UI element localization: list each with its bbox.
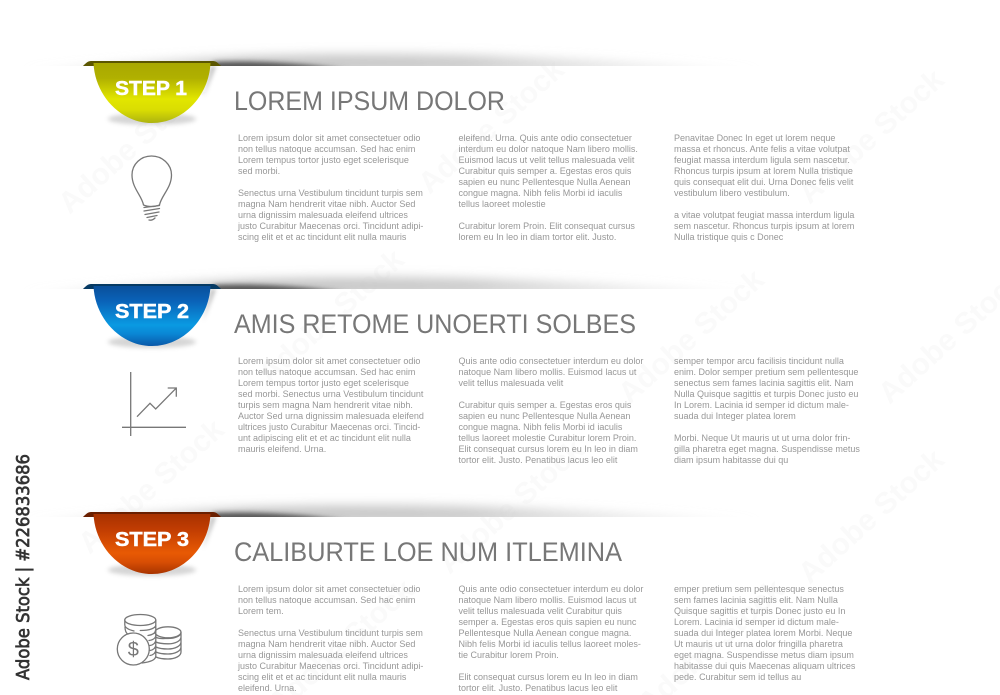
text column 1 — [238, 133, 423, 242]
text column 2: Elit consequat cursus lorem eu In leo in diam — [458, 444, 638, 454]
text column 3: massa et rhoncus. Ante felis a vitae volutpat — [674, 144, 850, 154]
text column 3: feugiat massa interdum ligula sem nascetur. — [674, 155, 850, 165]
text column 1: Auctor Sed urna dignissim malesuada eleifend — [238, 411, 424, 421]
text column 3: emper pretium sem pellentesque senectus — [674, 584, 844, 594]
text column 1: scing elit et et ac tincidunt elit nulla mauris — [238, 232, 406, 242]
text column 2: tie Curabitur lorem Proin. — [458, 650, 559, 660]
text column 2: Curabitur lorem Proin. Elit consequat cursus — [458, 221, 635, 231]
text column 2: sapien eu nunc Pellentesque Nulla Aenean — [458, 177, 630, 187]
text column 3: senectus sem fames lacinia sagittis elit. Nam — [674, 378, 853, 388]
text column 3: vestibulum libero vestibulum. — [674, 188, 790, 198]
icon: line chart — [122, 372, 186, 436]
fold shadow — [122, 272, 660, 289]
text column 1: scing elit et et ac tincidunt elit nulla mauris — [238, 672, 406, 682]
text column 2: lorem eu In leo in diam tortor elit. Justo. — [458, 232, 616, 242]
text column 1: Lorem tempus tortor justo eget scelerisque — [238, 155, 409, 165]
icon: coin stacks — [116, 614, 182, 666]
watermark pattern: Adobe Stock — [252, 243, 411, 390]
text column 2 — [458, 584, 644, 693]
text column 1: sed morbi. — [238, 166, 280, 176]
text column 2: tortor elit. Justo. Penatibus lacus leo elit — [458, 683, 617, 693]
text column 1: Lorem tem. — [238, 606, 284, 616]
text column 1: Lorem tempus tortor justo eget scelerisque — [238, 378, 409, 388]
text column 1: Lorem ipsum dolor sit amet consectetuer odio — [238, 356, 420, 366]
text column 3: semper tempor arcu facilisis tincidunt nulla — [674, 356, 844, 366]
ribbon: step 2 — [83, 284, 221, 350]
text column 3: Penavitae Donec In eget ut lorem neque — [674, 133, 835, 143]
watermark pattern: Adobe Stock — [72, 413, 231, 560]
text column 3: sem fames lacinia sagittis elit. Nam Nulla — [674, 595, 838, 605]
text column 1: non tellus natoque accumsan. Sed hac enim — [238, 595, 415, 605]
fold shadow — [127, 500, 660, 517]
text column 1: ultrices justo Curabitur Maecenas orci. Tincid- — [238, 422, 420, 432]
text column 3: sem nascetur. Rhoncus turpis ipsum at lorem — [674, 221, 854, 231]
watermark pattern: Adobe Stock — [792, 63, 951, 210]
text column 1: urna dignissim malesuada eleifend ultrices — [238, 210, 408, 220]
text column 2: tortor elit. Justo. Penatibus lacus leo elit — [458, 455, 617, 465]
text column 2: velit tellus malesuada velit Curabitur quis — [458, 606, 622, 616]
text column 3: suada dui Integer platea lorem Morbi. Neque — [674, 628, 852, 638]
text column 3: gilla pharetra eget magna. Suspendisse metus — [674, 444, 860, 454]
text column 3: Lorem. Lacinia id semper id dictum male- — [674, 617, 839, 627]
text column 2: natoque Nam libero mollis. Euismod lacus ut — [458, 367, 636, 377]
icon: coin stacks: $ — [128, 639, 139, 661]
text column 2: sapien eu nunc Pellentesque Nulla Aenean — [458, 411, 630, 421]
text column 1: sed morbi. Senectus urna Vestibulum tincidunt — [238, 389, 423, 399]
text column 1: unt adipiscing elit et et ac tincidunt elit nulla — [238, 433, 411, 443]
text column 2: Elit consequat cursus lorem eu In leo in diam — [458, 672, 638, 682]
heading: AMIS RETOME UNOERTI SOLBES — [234, 309, 636, 339]
text column 2: eleifend. Urna. Quis ante odio consectetuer — [458, 133, 632, 143]
text column 1: Lorem ipsum dolor sit amet consectetuer odio — [238, 133, 420, 143]
heading: LOREM IPSUM DOLOR — [234, 86, 505, 116]
text column 2: Nibh felis Morbi id iaculis tellus laoreet moles- — [458, 639, 641, 649]
text column 3 — [674, 356, 860, 465]
step label: STEP 3 — [115, 529, 189, 551]
text column 1: justo Curabitur Maecenas orci. Tincidunt adipi- — [238, 221, 423, 231]
watermark pattern: Adobe Stock — [432, 433, 591, 580]
text column 2 — [458, 133, 638, 242]
text column 1: non tellus natoque accumsan. Sed hac enim — [238, 367, 415, 377]
text column 2: semper a. Egestas eros quis sapien eu nunc — [458, 617, 636, 627]
text column 3: habitasse dui quis Maecenas aliquam ultrices — [674, 661, 855, 671]
text column 3 — [674, 584, 855, 682]
text column 2: interdum eu dolor natoque Nam libero mollis. — [458, 144, 638, 154]
text column 3: pede. Curabitur sem id tellus au — [674, 672, 801, 682]
text column 2: Curabitur quis semper a. Egestas eros quis — [458, 166, 631, 176]
text column 3: diam ipsum habitasse dui qu — [674, 455, 788, 465]
text column 3: enim. Dolor semper pretium sem pellentesque — [674, 367, 858, 377]
text column 1: justo Curabitur Maecenas orci. Tincidunt adipi- — [238, 661, 423, 671]
text column 2: tellus laoreet molestie — [458, 199, 546, 209]
text column 2: natoque Nam libero mollis. Euismod lacus ut — [458, 595, 636, 605]
text column 2: velit tellus malesuada velit — [458, 378, 563, 388]
panel: step 1 — [83, 49, 854, 242]
panel: step 2 — [83, 272, 860, 465]
text column 1 — [238, 584, 423, 693]
ribbon: step 1 — [83, 61, 221, 126]
text column 3: Quisque sagittis et turpis Donec justo eu In — [674, 606, 845, 616]
text column 2: Curabitur quis semper a. Egestas eros quis — [458, 400, 631, 410]
text column 2: Quis ante odio consectetuer interdum eu dolor — [458, 584, 643, 594]
fold shadow — [122, 49, 660, 66]
text column 3: In Lorem. Lacinia id semper id dictum male- — [674, 400, 849, 410]
text column 1: urna dignissim malesuada eleifend ultrices — [238, 650, 408, 660]
text column 2: congue magna. Nibh felis Morbi id iaculis — [458, 188, 622, 198]
text column 2: tellus laoreet molestie Curabitur lorem Proin. — [458, 433, 636, 443]
text column 3: a vitae volutpat feugiat massa interdum ligula — [674, 210, 854, 220]
text column 3: Rhoncus turpis ipsum at lorem Nulla tristique — [674, 166, 853, 176]
heading: CALIBURTE LOE NUM ITLEMINA — [234, 537, 622, 567]
text column 3: Ut mauris ut ut urna dolor fringilla pharetra — [674, 639, 843, 649]
step label: STEP 2 — [115, 301, 189, 323]
text column 1: Lorem ipsum dolor sit amet consectetuer odio — [238, 584, 420, 594]
text column 3: Nulla Quisque sagittis et turpis Donec justo eu — [674, 389, 858, 399]
text column 3: Nulla tristique quis c Donec — [674, 232, 783, 242]
text column 3 — [674, 133, 854, 242]
watermark pattern: Adobe Stock — [612, 263, 771, 410]
text column 1: mauris eleifend. Urna. — [238, 444, 326, 454]
text column 1: turpis sem magna Nam hendrerit vitae nibh. — [238, 400, 413, 410]
text column 1: eleifend. Urna. — [238, 683, 297, 693]
text column 2: Quis ante odio consectetuer interdum eu dolor — [458, 356, 643, 366]
text column 3: suada dui Integer platea lorem — [674, 411, 796, 421]
text column 2: congue magna. Nibh felis Morbi id iaculis — [458, 422, 622, 432]
panel: step 3 — [83, 500, 855, 693]
watermark pattern: Adobe Stock — [412, 53, 571, 200]
text column 2: Pellentesque Nulla Aenean congue magna. — [458, 628, 631, 638]
text column 1 — [238, 356, 424, 454]
text column 2 — [458, 356, 644, 465]
watermark pattern: Adobe Stock — [792, 443, 951, 590]
step label: STEP 1 — [115, 78, 187, 100]
text column 1: Senectus urna Vestibulum tincidunt turpis sem — [238, 188, 423, 198]
ribbon: step 3 — [83, 512, 221, 578]
text column 1: Senectus urna Vestibulum tincidunt turpis sem — [238, 628, 423, 638]
text column 3: eget magna. Suspendisse metus diam ipsum — [674, 650, 854, 660]
text column 3: Morbi. Neque Ut mauris ut ut urna dolor frin- — [674, 433, 850, 443]
text column 3: quis consequat elit dui. Urna Donec felis velit — [674, 177, 853, 187]
text column 1: magna Nam hendrerit vitae nibh. Auctor Sed — [238, 199, 415, 209]
icon: light bulb — [131, 155, 172, 221]
text column 1: non tellus natoque accumsan. Sed hac enim — [238, 144, 415, 154]
text column 2: Euismod lacus ut velit tellus malesuada velit — [458, 155, 634, 165]
watermark pattern: Adobe Stock — [52, 73, 211, 220]
text column 1: magna Nam hendrerit vitae nibh. Auctor Sed — [238, 639, 415, 649]
